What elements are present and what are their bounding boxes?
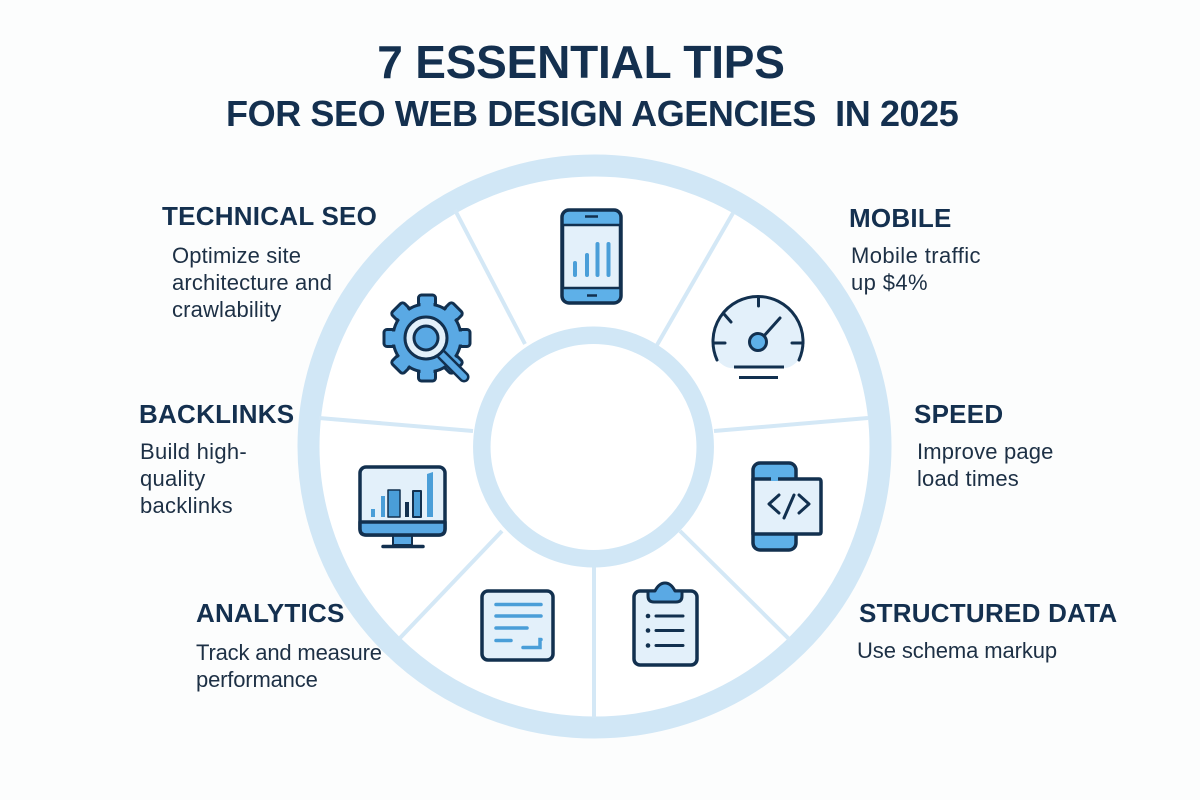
tip: backlinks: quality [140,466,205,491]
tip: technical seo: architecture and [172,270,332,295]
tip: speed [914,399,1054,491]
tip: speed: SPEED [914,399,1003,429]
tip: analytics: performance [196,667,318,692]
tip: technical seo [162,201,377,322]
tip: structured data [857,598,1117,663]
icon: code on device [753,463,821,550]
icon: clipboard [634,583,697,665]
tip: speed: load times [917,466,1019,491]
tip: speed: Improve page [917,439,1054,464]
icon: analytics monitor [360,467,445,546]
tip: analytics: ANALYTICS [196,598,345,628]
tip: mobile: Mobile traffic [851,243,981,268]
tip: analytics [196,598,382,692]
subtitle: FOR SEO WEB DESIGN AGENCIES IN 2025 [226,93,958,134]
tip: structured data: Use schema markup [857,638,1057,663]
tip: structured data: STRUCTURED DATA [859,598,1117,628]
tip: technical seo: TECHNICAL SEO [162,201,377,231]
icon: gear with magnifier [384,295,470,381]
tip: backlinks: BACKLINKS [139,399,294,429]
icon: phone with bars [562,210,621,303]
tip: backlinks [139,399,294,518]
tip: mobile: MOBILE [849,203,952,233]
icon: speed gauge [713,296,803,378]
tip: backlinks: Build high- [140,439,247,464]
tip: backlinks: backlinks [140,493,233,518]
tip: mobile: up $4% [851,270,928,295]
icon: document [482,591,553,660]
title: 7 ESSENTIAL TIPS [377,36,785,88]
tip: analytics: Track and measure [196,640,382,665]
tip: technical seo: crawlability [172,297,281,322]
tip: mobile [849,203,981,295]
tip: technical seo: Optimize site [172,243,301,268]
wheel [308,166,880,728]
